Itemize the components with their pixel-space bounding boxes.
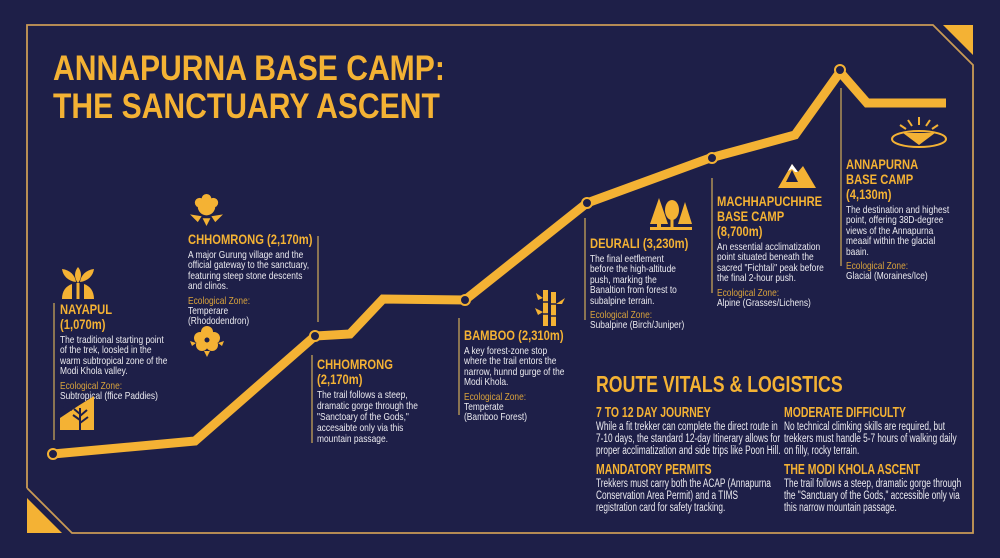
panel: Bamboo: BAMBOO (2,310m) bbox=[464, 327, 564, 343]
panel: Bamboo: Ecological Zone: bbox=[464, 391, 526, 403]
block: ascent: THE MODI KHOLA ASCENT bbox=[784, 462, 920, 478]
panel: Annapurna Base Camp: (4,130m) bbox=[846, 186, 891, 202]
panel: Deurali: DEURALI (3,230m) bbox=[590, 235, 688, 251]
panel: Chhomrong lower: (2,170m) bbox=[317, 371, 362, 387]
title: THE SANCTUARY ASCENT bbox=[53, 87, 440, 126]
panel: route vitals bbox=[596, 371, 961, 514]
panel: Chhomrong top: A major Gurung village and the official gateway to the sanctuary, featuring steep stone descents and clinos. bbox=[188, 249, 309, 292]
block: journey: While a fit trekker can complete the direct route in 7-10 days, the standard 12-day Itinerary allows for proper acclimatization and side trips like Poon Hill. bbox=[596, 421, 781, 457]
panel: Chhomrong top: CHHOMRONG (2,170m) bbox=[188, 231, 312, 247]
panel: Bamboo: A key forest-zone stop where the trail entors the narrow, hunnd gurge of the Modi Khola. bbox=[464, 345, 564, 388]
panel: Chhomrong lower bbox=[317, 356, 418, 445]
block: difficulty: No technical climking skills are required, but trekkers must handle 5-7 hours of walking daily on filly, rocky terrain. bbox=[784, 421, 957, 457]
block: difficulty: MODERATE DIFFICULTY bbox=[784, 405, 906, 421]
icon: trees bbox=[650, 198, 692, 230]
panel: Bamboo: Temperate bbox=[464, 401, 504, 413]
icon: rhododendron bbox=[190, 194, 223, 226]
panel: Nayapul: The traditional starting point of the trek, loosled in the warm subtropical zone of the Modi Khola valley. bbox=[60, 334, 167, 377]
title: ANNAPURNA BASE CAMP: bbox=[53, 49, 445, 88]
panel: Deurali: Ecological Zone: bbox=[590, 309, 652, 321]
panel: Bamboo bbox=[464, 327, 564, 423]
icon: mountain bbox=[778, 164, 816, 188]
panel: Machhapuchhre: An essential acclimatization point situated beneath the sacred "Fichtali" peak before the final 2-hour push. bbox=[717, 241, 824, 284]
panel: Nayapul: Subtropical (ffice Paddies) bbox=[60, 390, 158, 402]
panel: Machhapuchhre: (8,700m) bbox=[717, 223, 762, 239]
panel: Bamboo: (Bamboo Forest) bbox=[464, 411, 527, 423]
panel: Nayapul: Ecological Zone: bbox=[60, 380, 122, 392]
block: permits: Trekkers must carry both the ACAP (Annapurna Conservation Area Permit) and a TIMS registration card for safety tracking. bbox=[596, 478, 771, 514]
block: permits bbox=[596, 462, 771, 514]
title bbox=[53, 49, 445, 126]
panel: Annapurna Base Camp: BASE CAMP bbox=[846, 171, 913, 187]
panel: Machhapuchhre: Ecological Zone: bbox=[717, 287, 779, 299]
panel: Deurali bbox=[590, 235, 688, 331]
panel: Chhomrong top: Temperare bbox=[188, 305, 228, 317]
icon: flower bbox=[190, 326, 224, 357]
panel: Nayapul: (1,070m) bbox=[60, 316, 105, 332]
block: ascent: The trail follows a steep, dramatic gorge through the "Sanctuary of the Gods," accessible only via this narrow mountain passage. bbox=[784, 478, 961, 514]
icon: palm bbox=[62, 267, 94, 299]
block: ascent bbox=[784, 462, 961, 514]
block: difficulty bbox=[784, 405, 957, 457]
panel: Chhomrong lower: CHHOMRONG bbox=[317, 356, 393, 372]
icon: bamboo bbox=[535, 290, 565, 326]
panel: Deurali: Subalpine (Birch/Juniper) bbox=[590, 319, 684, 331]
panel: Annapurna Base Camp: The destination and highest point, offering 38D-degree views of the Annapurna meaaif within the glacial baain. bbox=[846, 204, 949, 258]
panel: Deurali: The final eetflement before the high-altitude push, marking the Banaltion from forest to subalpine terrain. bbox=[590, 253, 677, 307]
panel: Annapurna Base Camp bbox=[846, 156, 950, 282]
panel: Chhomrong top bbox=[188, 231, 312, 327]
block: permits: MANDATORY PERMITS bbox=[596, 462, 712, 478]
icon: rice plant bbox=[60, 396, 94, 430]
panel: Nayapul: NAYAPUL bbox=[60, 301, 112, 317]
panel: Chhomrong lower: The trail follows a steep, dramatic gorge through the "Sanctoary of the Gods," accesaibte only via this mountain passage. bbox=[317, 389, 418, 445]
icon: sunrise basin bbox=[891, 117, 947, 148]
panel: Annapurna Base Camp: Glacial (Moraines/Ice) bbox=[846, 270, 928, 282]
panel: Machhapuchhre: Alpine (Grasses/Lichens) bbox=[717, 297, 811, 309]
heading: route vitals: ROUTE VITALS & LOGISTICS bbox=[596, 371, 843, 397]
panel: Annapurna Base Camp: Ecological Zone: bbox=[846, 260, 908, 272]
block: journey: 7 TO 12 DAY JOURNEY bbox=[596, 405, 711, 421]
panel: Machhapuchhre: MACHHAPUCHHRE bbox=[717, 193, 822, 209]
panel: Machhapuchhre bbox=[717, 193, 824, 309]
panel: Chhomrong top: (Rhododendron) bbox=[188, 315, 249, 327]
panel: Nayapul bbox=[60, 301, 168, 402]
block: journey bbox=[596, 405, 781, 457]
panel: Machhapuchhre: BASE CAMP bbox=[717, 208, 784, 224]
panel: Annapurna Base Camp: ANNAPURNA bbox=[846, 156, 918, 172]
panel: Chhomrong top: Ecological Zone: bbox=[188, 295, 250, 307]
